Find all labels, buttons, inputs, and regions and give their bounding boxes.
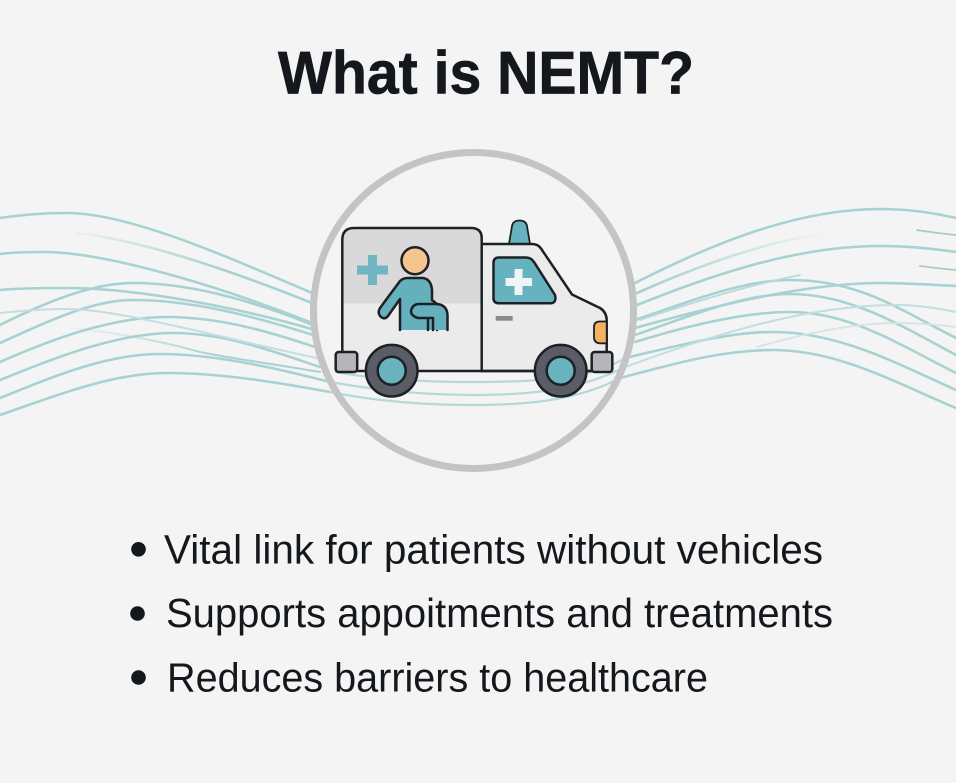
bullet item 2: Supports appoitments and treatments	[166, 590, 833, 636]
left flowing lines	[0, 213, 330, 415]
front bumper	[592, 352, 612, 372]
bullet item 3: Reduces barriers to healthcare	[167, 654, 708, 700]
beacon light	[509, 220, 530, 244]
right flowing lines	[620, 209, 956, 408]
circle badge	[314, 152, 634, 468]
door handle	[496, 316, 513, 321]
cab window	[494, 258, 555, 303]
rear box	[342, 228, 482, 371]
front wheel	[535, 345, 586, 397]
patient figure	[379, 247, 448, 330]
bullet list	[130, 526, 833, 700]
window cross	[506, 269, 532, 295]
underbody line	[357, 370, 592, 372]
bullet item 1: Vital link for patients without vehicles	[164, 526, 823, 572]
lines passing through the circle	[330, 358, 625, 405]
title: What is NEMT?	[278, 39, 694, 106]
cab	[481, 244, 607, 371]
rear bumper	[336, 352, 357, 372]
icon: ambulance	[336, 220, 612, 397]
rear wheel	[366, 345, 418, 397]
medical cross on box	[357, 255, 388, 285]
headlight	[594, 322, 607, 343]
